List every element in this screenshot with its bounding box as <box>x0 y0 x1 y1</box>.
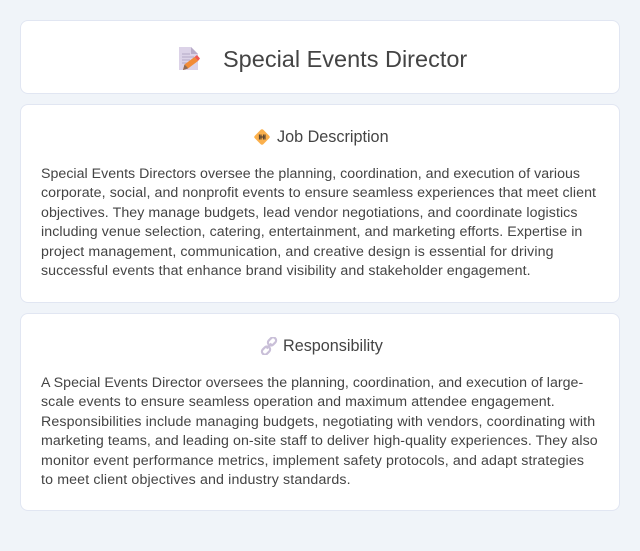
panel: responsibility <box>20 313 620 511</box>
text block: responsibility: scale events to ensure seamless operation and maximum attendee engagement. <box>41 394 555 410</box>
text block: job description: corporate, social, and nonprofit events to ensure seamless experiences that meet client <box>41 185 596 201</box>
panel: job description <box>20 104 620 303</box>
text block: responsibility <box>41 375 598 488</box>
heading: responsibility: Responsibility <box>283 337 383 355</box>
icon: document with pencil <box>179 47 200 70</box>
text block: job description: objectives. They manage budgets, lead vendor negotiations, and coordinate logistics <box>41 205 578 221</box>
icon: diamond road sign <box>254 129 270 145</box>
text block: job description <box>41 166 596 279</box>
heading: job description: Job Description <box>277 128 389 146</box>
text block: responsibility: monitor event performance metrics, implement safety protocols, and adapt strategies <box>41 453 584 469</box>
text block: responsibility: to meet client objectives and industry standards. <box>41 472 351 488</box>
text block: job description: Special Events Directors oversee the planning, coordination, and execution of various <box>41 166 580 182</box>
text block: responsibility: A Special Events Director oversees the planning, coordination, and execution of large- <box>41 375 583 391</box>
text block: job description: including venue selection, catering, entertainment, and marketing efforts. Expertise in <box>41 224 582 240</box>
icon: chain link <box>260 337 278 355</box>
text block: job description: project management, communication, and creative design is essential for driving <box>41 244 554 260</box>
panel: title card <box>20 20 620 94</box>
text block: responsibility: marketing teams, and leading on-site staff to deliver high-quality experiences. They also <box>41 433 598 449</box>
text block: job description: successful events that enhance brand visibility and stakeholder engagement. <box>41 263 531 279</box>
title: Special Events Director <box>223 46 467 72</box>
text block: responsibility: Responsibilities include managing budgets, negotiating with vendors, coordinating with <box>41 414 595 430</box>
